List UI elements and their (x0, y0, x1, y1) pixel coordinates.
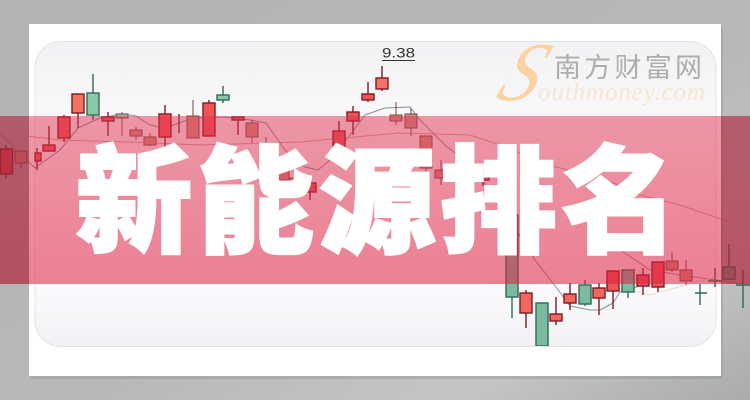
peak price label 9.38: 9.38 (382, 44, 415, 60)
moving average lines (0, 107, 750, 310)
red candles (0, 66, 664, 328)
logo url: outhmoney.com (538, 79, 705, 106)
logo swoosh letter S: S (486, 26, 563, 119)
logo Chinese name: 南方财富网 (554, 53, 702, 83)
candlestick chart (0, 44, 750, 346)
translucent pink banner (0, 116, 750, 284)
chart panel (35, 42, 716, 346)
peak price label 9.38 (382, 48, 415, 61)
title: 新能源排名 (76, 138, 678, 268)
muted brown candles (15, 100, 692, 285)
watermark logo: southmoney (486, 26, 705, 119)
green candles (87, 74, 750, 346)
